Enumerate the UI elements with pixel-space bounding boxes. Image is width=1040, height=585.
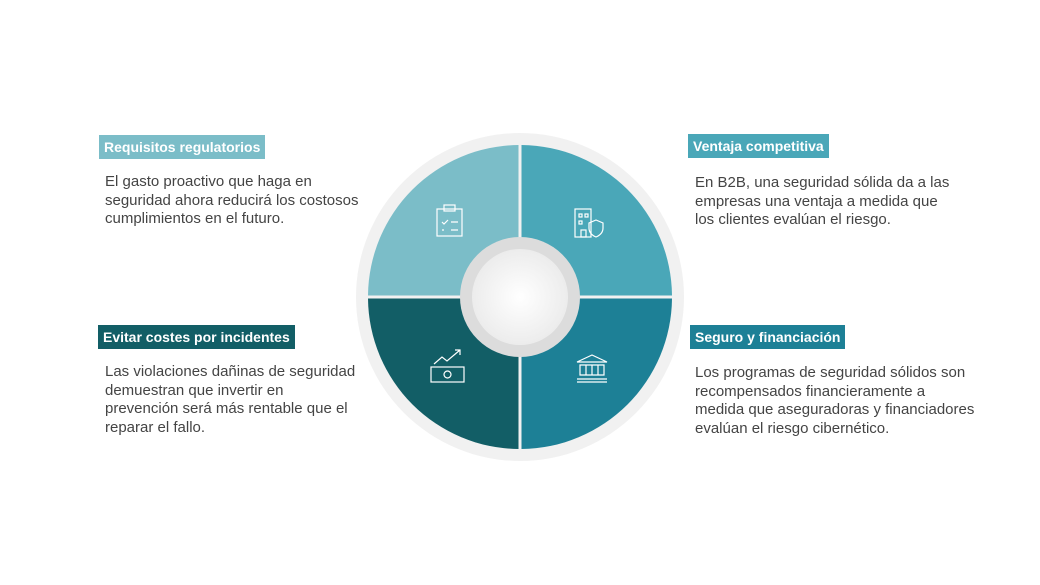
text: requisitos: cumplimientos en el futuro. [105, 210, 284, 227]
text: requisitos: seguridad ahora reducirá los costosos [105, 192, 358, 208]
text: evitar: prevención será más rentable que el [105, 400, 348, 417]
label: Requisitos regulatorios [99, 135, 265, 159]
label: Seguro y financiación [690, 325, 845, 349]
text: ventaja: los clientes evalúan el riesgo. [695, 211, 891, 228]
label: Ventaja competitiva [688, 134, 829, 158]
text: requisitos: El gasto proactivo que haga en [105, 173, 312, 190]
text: evitar: reparar el fallo. [105, 418, 205, 436]
text: seguro: Los programas de seguridad sólidos son [695, 364, 965, 381]
icon: money growth [431, 350, 464, 382]
text: evitar: demuestran que invertir en [105, 382, 283, 398]
icon: bank [577, 355, 607, 382]
text: evitar: Las violaciones dañinas de seguridad [105, 363, 355, 380]
label: Evitar costes [98, 325, 295, 349]
text: ventaja: empresas una ventaja a medida que [695, 192, 938, 210]
label: Seguro y financiación: Seguro y financiación [695, 329, 840, 345]
text: ventaja: En B2B, una seguridad sólida da a las [695, 174, 949, 191]
label: Requisitos regulatorios: Requisitos regulatorios [104, 139, 260, 155]
text: seguro: medida que aseguradoras y financiadores [695, 401, 974, 418]
text: requisitos [105, 173, 358, 227]
text: ventaja [695, 174, 949, 228]
label: Evitar costes: Evitar costes por incidentes [103, 329, 290, 345]
icon: building shield [575, 209, 603, 237]
text: seguro: recompensados financieramente a [695, 382, 925, 400]
text: seguro: evalúan el riesgo cibernético. [695, 420, 889, 436]
text: seguro [695, 364, 974, 436]
text: evitar [105, 363, 355, 436]
icon: clipboard [437, 205, 462, 236]
label: Ventaja competitiva: Ventaja competitiva [693, 138, 824, 154]
